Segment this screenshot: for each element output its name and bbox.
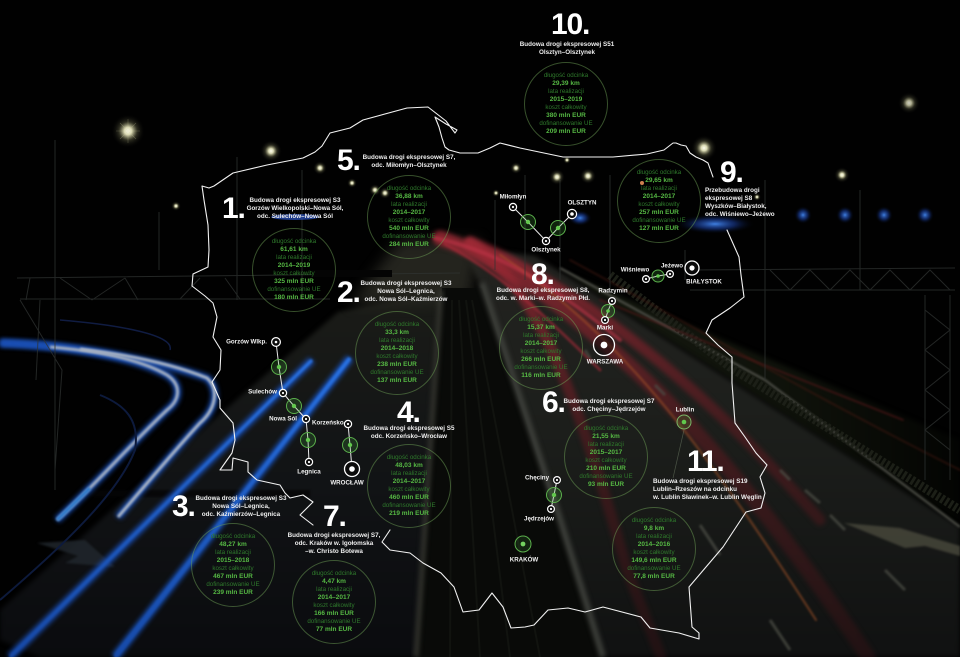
panel: project 1: lata realizacji (276, 254, 312, 261)
panel: project 1: 61,61 km (280, 246, 308, 253)
panel: project 4: odc. Korzeńsko–Wrocław (371, 433, 447, 440)
panel: project 1: koszt całkowity (273, 270, 315, 277)
route: Wiśniewo – Jeżewo, Białystok (643, 261, 699, 282)
panel: project 9: 257 mln EUR (639, 209, 679, 216)
city labels: Miłomłyn (500, 194, 527, 201)
panel: project 10: lata realizacji (548, 88, 584, 95)
route: Chęciny – Jędrzejów (546, 477, 562, 512)
panel: project 5: odc. Miłomłyn–Olsztynek (371, 162, 447, 169)
panel: project 2: 33,3 km (385, 329, 409, 336)
panel: project 6: Budowa drogi ekspresowej S7 (564, 398, 654, 405)
panel: project 8: 15,37 km (527, 324, 555, 331)
panel: project 3 (172, 490, 286, 607)
panel: project 4: koszt całkowity (388, 486, 430, 493)
panel: project 9: koszt całkowity (638, 201, 680, 208)
city labels: Olsztynek (531, 247, 561, 254)
panel: project 10: długość odcinka (544, 72, 588, 79)
panel: project 7: 77 mln EUR (316, 626, 352, 633)
panel: project 11: 9,8 km (644, 525, 664, 532)
panel: project 2: lata realizacji (379, 337, 415, 344)
panel: project 11: 11. (687, 445, 723, 478)
panel: project 6: lata realizacji (588, 441, 624, 448)
panel: project 6: dofinansowanie UE (579, 473, 633, 480)
city labels: KRAKÓW (510, 556, 538, 564)
panel: project 8: Budowa drogi ekspresowej S8, (497, 287, 589, 294)
panel: project 8: odc. w. Marki–w. Radzymin Płd. (496, 295, 590, 302)
panel: project 10: koszt całkowity (545, 104, 587, 111)
panel: project 11: w. Lublin Sławinek–w. Lublin Węglin (653, 494, 762, 501)
city labels: Radzymin (598, 288, 628, 295)
panel: project 2: odc. Nowa Sól–Kaźmierzów (365, 296, 447, 303)
panel: project 8: 116 mln EUR (521, 372, 561, 379)
panel: project 10: Budowa drogi ekspresowej S51 (520, 41, 614, 48)
panel: project 11: Lublin–Rzeszów na odcinku (653, 486, 737, 493)
panel: project 7: dofinansowanie UE (307, 618, 361, 625)
panel: project 2: dofinansowanie UE (370, 369, 424, 376)
panel: project 8 (496, 258, 590, 390)
panel: project 1: długość odcinka (272, 238, 316, 245)
city labels: Gorzów Wlkp. (226, 339, 267, 346)
panel: project 6: 93 mln EUR (588, 481, 624, 488)
route: Marki – Radzymin, Warszawa (594, 298, 615, 356)
right carriageway (462, 246, 960, 657)
panel: project 7: 166 mln EUR (314, 610, 354, 617)
panel: project 3: 239 mln EUR (213, 589, 253, 596)
city labels: Chęciny (525, 475, 550, 482)
street lights (111, 92, 920, 211)
panel: project 3: odc. Kaźmierzów–Legnica (202, 511, 280, 518)
panel: project 5: dofinansowanie UE (382, 233, 436, 240)
panel: project 3: 467 mln EUR (213, 573, 253, 580)
panel: project 4: dofinansowanie UE (382, 502, 436, 509)
panel: project 1: Budowa drogi ekspresowej S3 (250, 197, 340, 204)
panel: project 11: Budowa drogi ekspresowej S19 (653, 478, 747, 485)
panel: project 2 (337, 276, 452, 395)
panel: project 5: 540 mln EUR (389, 225, 429, 232)
red light trails (435, 238, 960, 657)
panel: project 11: długość odcinka (632, 517, 676, 524)
city labels: Sulechów (248, 389, 277, 396)
road arrows (844, 523, 960, 556)
panel: project 8: 2014–2017 (525, 340, 557, 347)
city labels: Lublin (676, 407, 694, 414)
panel: project 3: 2015–2018 (217, 557, 249, 564)
panel: project 1: dofinansowanie UE (267, 286, 321, 293)
panel: project 5: Budowa drogi ekspresowej S7, (363, 154, 455, 161)
panel: project 1 (222, 192, 343, 312)
panel: project 5: koszt całkowity (388, 217, 430, 224)
panel: project 10 (520, 8, 614, 146)
city labels: BIAŁYSTOK (686, 279, 722, 286)
gantries and poles (17, 140, 955, 490)
city labels: Marki (597, 325, 613, 332)
median (416, 288, 603, 657)
panel: project 11: dofinansowanie UE (627, 565, 681, 572)
panel: project 2: Budowa drogi ekspresowej S3 (361, 280, 451, 287)
panel: project 9: ekspresowej S8 (705, 195, 752, 202)
panel: project 9: 29,65 km (645, 177, 673, 184)
panel: project 4: Budowa drogi ekspresowej S5 (364, 425, 454, 432)
panel: project 11: lata realizacji (636, 533, 672, 540)
panel: project 1: 325 mln EUR (274, 278, 314, 285)
city labels: Jędrzejów (524, 516, 554, 523)
panel: project 2: Nowa Sól–Legnica, (377, 288, 435, 295)
shadow band (90, 490, 310, 497)
blue lamps (271, 206, 934, 234)
Poland border outline (192, 107, 767, 639)
panel: project 7: Budowa drogi ekspresowej S7, (288, 532, 380, 539)
route: Miłomłyn – Olsztynek – Olsztyn (509, 203, 577, 245)
panel: project 1: odc. Sulechów–Nowa Sól (257, 213, 333, 220)
panel: project 8: dofinansowanie UE (514, 364, 568, 371)
panel: project 4 (364, 396, 454, 528)
panel: project 9: lata realizacji (641, 185, 677, 192)
panel: project 8: 266 mln EUR (521, 356, 561, 363)
panel: project 9: odc. Wiśniewo–Jeżewo (705, 211, 775, 218)
panel: project 6: 210 mln EUR (586, 465, 626, 472)
panel: project 9 (617, 156, 775, 243)
panel: project 4: 2014–2017 (393, 478, 425, 485)
panel: project 8: koszt całkowity (520, 348, 562, 355)
city labels: Nowa Sól (269, 416, 297, 423)
panel: project 4: 460 mln EUR (389, 494, 429, 501)
city labels: Legnica (297, 469, 321, 476)
panel: project 4: długość odcinka (387, 454, 431, 461)
city labels: Korzeńsko (312, 420, 344, 427)
panel: project 7 (288, 500, 380, 644)
panel: project 6: 2015–2017 (590, 449, 622, 456)
panel: project 1: Gorzów Wielkopolski–Nowa Sól, (247, 205, 343, 212)
panel: project 5: 36,88 km (395, 193, 423, 200)
panel: project 9: 127 mln EUR (639, 225, 679, 232)
panel: project 5 (337, 144, 455, 259)
panel: project 11 (612, 445, 762, 591)
panel: project 5: 284 mln EUR (389, 241, 429, 248)
right edge line and guardrail (560, 268, 960, 527)
panel: project 9: 9. (720, 156, 743, 189)
city labels: Wiśniewo (621, 267, 649, 274)
panel: project 10: Olsztyn–Olsztynek (539, 49, 595, 56)
city labels: OLSZTYN (568, 200, 597, 207)
panel: project 4: 48,03 km (395, 462, 423, 469)
panel: project 3: lata realizacji (215, 549, 251, 556)
city labels: WARSZAWA (587, 359, 624, 366)
panel: project 6: 6. (542, 386, 565, 419)
panel: project 10: 380 mln EUR (546, 112, 586, 119)
city labels (226, 194, 722, 564)
panel: project 5: 5. (337, 144, 360, 177)
panel: project 7: 7. (323, 500, 346, 533)
panel: project 3: 48,27 km (219, 541, 247, 548)
panel: project 10: 10. (551, 8, 589, 41)
panel: project 4: 4. (397, 396, 420, 429)
panel: project 1: 2014–2019 (278, 262, 310, 269)
panel: project 6: koszt całkowity (585, 457, 627, 464)
panel: project 10: 29,39 km (552, 80, 580, 87)
panel: project 9: 2014–2017 (643, 193, 675, 200)
blue light trails (0, 320, 350, 657)
panel: project 10: 2015–2019 (550, 96, 582, 103)
panel: project 4: lata realizacji (391, 470, 427, 477)
panel: project 10: dofinansowanie UE (539, 120, 593, 127)
panel: project 3: Budowa drogi ekspresowej S3 (196, 495, 286, 502)
panel: project 3: długość odcinka (211, 533, 255, 540)
panel: project 2: koszt całkowity (376, 353, 418, 360)
panel: project 3: koszt całkowity (212, 565, 254, 572)
panel: project 8: 8. (531, 258, 554, 291)
panel: project 9: dofinansowanie UE (632, 217, 686, 224)
panel: project 2: 2. (337, 276, 360, 309)
panel: project 1: 1. (222, 192, 245, 225)
panel: project 9: długość odcinka (637, 169, 681, 176)
panel: project 6: długość odcinka (584, 425, 628, 432)
panel: project 10: 209 mln EUR (546, 128, 586, 135)
panel: project 7: 4,47 km (322, 578, 346, 585)
panel: project 1: 180 mln EUR (274, 294, 314, 301)
panel: project 6: 21,55 km (592, 433, 620, 440)
panel: project 2: długość odcinka (375, 321, 419, 328)
city labels: WROCŁAW (330, 480, 364, 487)
panel: project 8: długość odcinka (519, 316, 563, 323)
panel: project 9: Wyszków–Białystok, (705, 203, 766, 210)
panel: project 7: lata realizacji (316, 586, 352, 593)
panel: project 2: 2014–2018 (381, 345, 413, 352)
panel: project 5: 2014–2017 (393, 209, 425, 216)
panel: project 2: 137 mln EUR (377, 377, 417, 384)
city labels: Jeżewo (661, 263, 683, 270)
panel: project 8: lata realizacji (523, 332, 559, 339)
panel: project 6: odc. Chęciny–Jędrzejów (572, 406, 646, 413)
verge right (540, 262, 960, 527)
panel: project 2: 238 mln EUR (377, 361, 417, 368)
panel: project 11: 149,6 mln EUR (631, 557, 677, 564)
panel: project 7: 2014–2017 (318, 594, 350, 601)
marker: Kraków (515, 536, 531, 552)
route: Korzeńsko – Wrocław (342, 420, 360, 476)
panel: project 5: długość odcinka (387, 185, 431, 192)
panel: project 11: koszt całkowity (633, 549, 675, 556)
panel: project 9: Przebudowa drogi (705, 187, 760, 194)
panel: project 5: lata realizacji (391, 201, 427, 208)
panel: project 6 (542, 386, 654, 499)
panel: project 3: 3. (172, 490, 195, 523)
panel: project 7: koszt całkowity (313, 602, 355, 609)
panel: project 7: –w. Christo Botewa (305, 548, 363, 555)
panel: project 11: 77,8 mln EUR (633, 573, 675, 580)
panel: project 3: Nowa Sól–Legnica, (212, 503, 270, 510)
panel: project 7: odc. Kraków w. Igołomska (295, 540, 373, 547)
left carriageway (0, 290, 442, 657)
route: Gorzów – Legnica (272, 338, 316, 466)
panel: project 7: długość odcinka (312, 570, 356, 577)
marker: Lublin (673, 415, 691, 478)
panel: project 4: 219 mln EUR (389, 510, 429, 517)
panel: project 3: dofinansowanie UE (206, 581, 260, 588)
lane dashes (585, 350, 905, 650)
panel: project 11: 2014–2016 (638, 541, 670, 548)
